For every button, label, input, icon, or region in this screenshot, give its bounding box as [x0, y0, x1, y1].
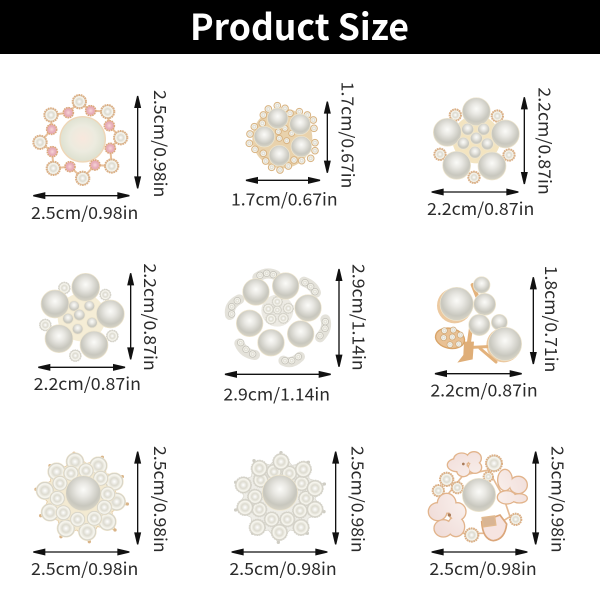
width arrow 6	[435, 371, 522, 376]
height label 9: 2.5cm/0.98in	[547, 446, 572, 553]
width label 9: 2.5cm/0.98in	[429, 555, 537, 580]
height arrow 8	[333, 452, 338, 544]
width label 4: 2.2cm/0.87in	[34, 370, 141, 395]
height arrow 3	[522, 97, 527, 184]
width label 5: 2.9cm/1.14in	[223, 381, 330, 406]
width label 3: 2.2cm/0.87in	[427, 195, 534, 220]
width label 2: 1.7cm/0.67in	[231, 185, 338, 210]
width arrow 2	[246, 178, 320, 183]
height label 5: 2.9cm/1.14in	[348, 264, 373, 371]
brooch 4	[40, 273, 124, 361]
height label 2: 1.7cm/0.67in	[337, 82, 362, 188]
height label 3: 2.2cm/0.87in	[533, 87, 558, 195]
item 3: gold pearl flower brooch	[427, 87, 558, 220]
item 4: cream pearl flower brooch	[34, 263, 164, 395]
height arrow 9	[533, 452, 538, 544]
item 7: gold rhinestone star brooch	[31, 446, 174, 580]
height arrow 2	[325, 102, 330, 173]
title bar	[0, 0, 600, 54]
item 2: five pearl cluster brooch	[231, 82, 362, 210]
height label 6: 1.8cm/0.71in	[540, 266, 565, 372]
height label 7: 2.5cm/0.98in	[149, 446, 174, 553]
title: Product Size	[190, 0, 409, 51]
height arrow 6	[531, 277, 536, 364]
width label 1: 2.5cm/0.98in	[31, 199, 138, 224]
width arrow 5	[225, 372, 331, 377]
height label 4: 2.2cm/0.87in	[139, 263, 164, 371]
brooch 5	[228, 270, 329, 364]
brooch 6	[434, 277, 522, 363]
width label 7: 2.5cm/0.98in	[31, 555, 138, 580]
item 5: silver pearl wreath brooch	[223, 264, 373, 406]
item 1: pink rhinestone and pearl brooch	[31, 90, 174, 224]
width arrow 7	[33, 549, 129, 555]
height arrow 4	[128, 273, 133, 359]
flower outlines	[429, 452, 527, 536]
height arrow 7	[135, 452, 140, 544]
brooch 2	[246, 102, 318, 173]
brooch 7	[34, 452, 129, 543]
height arrow 5	[336, 269, 342, 367]
width label 8: 2.5cm/0.98in	[229, 555, 337, 580]
height arrow 1	[135, 96, 140, 188]
width arrow 3	[432, 189, 518, 195]
width label 6: 2.2cm/0.87in	[430, 376, 538, 401]
item 9: pink enamel flower brooch	[429, 446, 572, 580]
flower petals	[429, 452, 527, 536]
height label 8: 2.5cm/0.98in	[347, 446, 372, 553]
width arrow 4	[38, 365, 125, 370]
brooch 3	[433, 98, 519, 183]
width arrow 9	[432, 549, 527, 555]
brooch 1	[33, 95, 127, 185]
width arrow 1	[33, 193, 129, 198]
width arrow 8	[232, 549, 327, 555]
height label 1: 2.5cm/0.98in	[149, 90, 174, 197]
item 8: silver rhinestone star brooch	[229, 446, 372, 580]
brooch 8	[234, 451, 326, 544]
item 6: gold branch pearl brooch	[430, 266, 565, 401]
brooch 9	[429, 452, 527, 542]
